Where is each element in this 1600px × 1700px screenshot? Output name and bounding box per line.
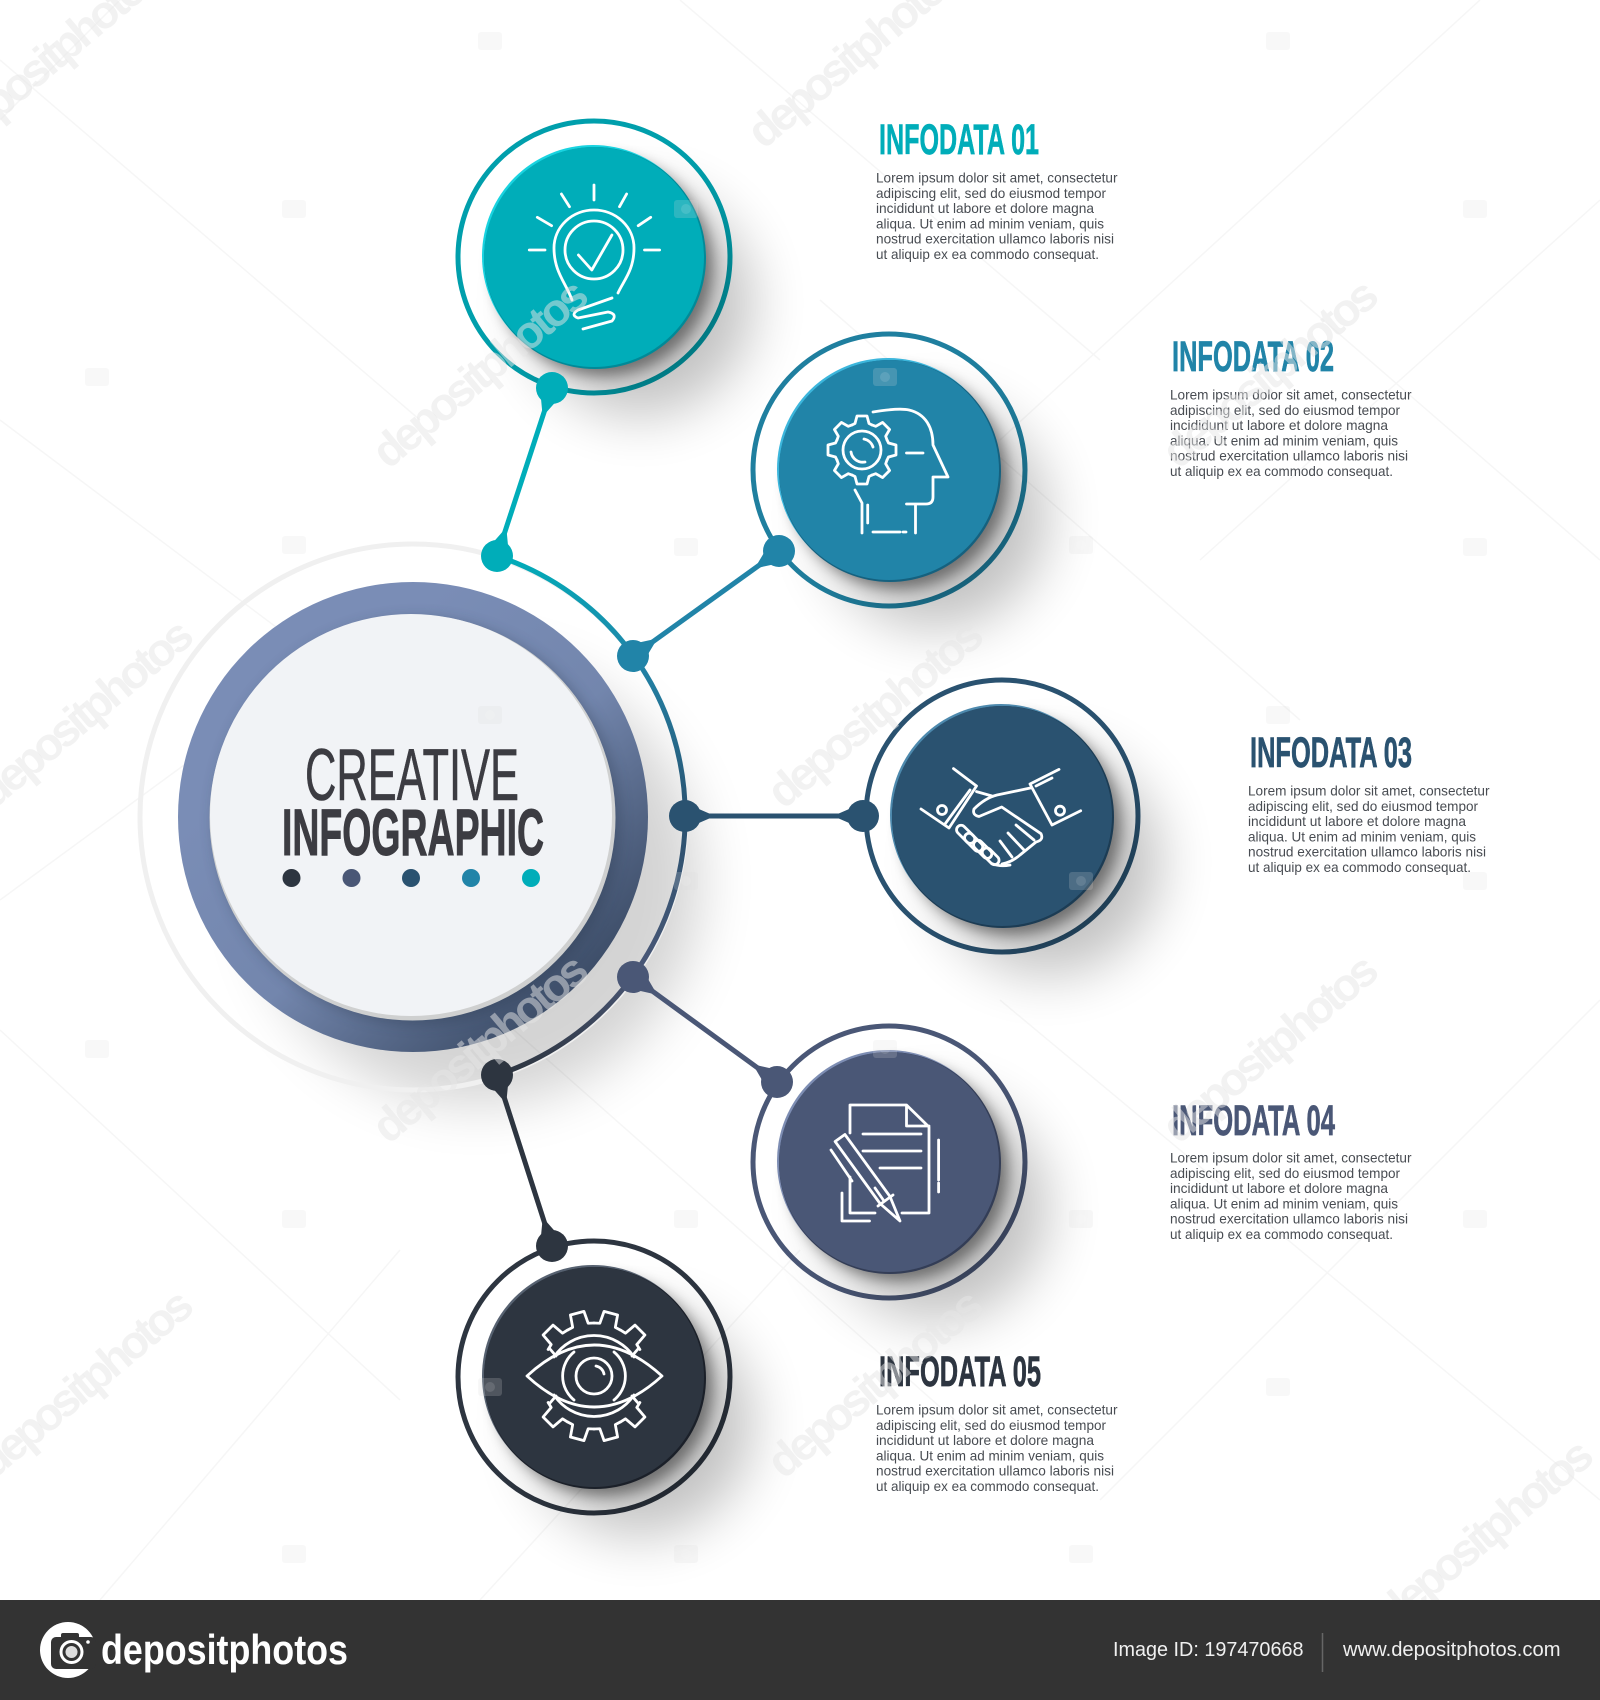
body 05: adipiscing elit, sed do eiusmod tempor (876, 1418, 1106, 1433)
heading 04: INFODATA 04 (1172, 1097, 1335, 1145)
node 1: bulb (458, 121, 752, 415)
body 02: adipiscing elit, sed do eiusmod tempor (1170, 403, 1400, 418)
body 01: nostrud exercitation ullamco laboris nisi (876, 232, 1114, 247)
ring 5 (458, 1241, 730, 1513)
body 04: ut aliquip ex ea commodo consequat. (1170, 1227, 1393, 1242)
depositphotos watermarks: depositphotos (362, 943, 598, 1153)
body 05 (876, 1402, 1118, 1494)
body 03: Lorem ipsum dolor sit amet, consectetur (1248, 784, 1490, 798)
body 03: ut aliquip ex ea commodo consequat. (1248, 860, 1471, 875)
text block 05 (876, 1348, 1118, 1494)
ring 2 (753, 334, 1025, 606)
text block 03 (1248, 729, 1490, 875)
camera watermarks (85, 32, 1487, 1563)
body 04: adipiscing elit, sed do eiusmod tempor (1170, 1166, 1400, 1181)
image id: Image ID: 197470668 (1113, 1639, 1304, 1661)
connector 1 (481, 372, 568, 572)
connector 4 (617, 961, 793, 1098)
text block 01 (876, 116, 1118, 262)
ring 4 (753, 1026, 1025, 1298)
body 01: ut aliquip ex ea commodo consequat. (876, 247, 1099, 262)
body 01: adipiscing elit, sed do eiusmod tempor (876, 186, 1106, 201)
body 03: incididunt ut labore et dolore magna (1248, 814, 1466, 829)
body 04: incididunt ut labore et dolore magna (1170, 1181, 1388, 1196)
body 02: Lorem ipsum dolor sit amet, consectetur (1170, 388, 1412, 402)
body 02: ut aliquip ex ea commodo consequat. (1170, 464, 1393, 479)
body 04 (1170, 1150, 1412, 1242)
disc 2 (777, 358, 1001, 582)
faint outer ring (140, 544, 686, 1090)
depositphotos watermarks: depositphotos (1152, 268, 1388, 478)
body 02: incididunt ut labore et dolore magna (1170, 418, 1388, 433)
shadow 1 (493, 156, 752, 415)
icon: handshake (921, 769, 1081, 867)
icon: camera badge (40, 1622, 96, 1678)
depositphotos watermarks: depositphotos (757, 1278, 993, 1488)
hub colour dots (282, 869, 540, 887)
text block 02 (1170, 333, 1412, 479)
icon: light bulb with check (529, 185, 660, 329)
body 05: aliqua. Ut enim ad minim veniam, quis (876, 1448, 1104, 1463)
body 04: aliqua. Ut enim ad minim veniam, quis (1170, 1196, 1398, 1211)
hub outer ring (178, 582, 648, 1052)
heading 01: INFODATA 01 (879, 116, 1039, 164)
body 02 (1170, 388, 1412, 479)
connector 3 (669, 800, 879, 832)
body 04: nostrud exercitation ullamco laboris nisi (1170, 1212, 1408, 1227)
body 03: aliqua. Ut enim ad minim veniam, quis (1248, 829, 1476, 844)
node 5: eye (458, 1241, 752, 1535)
depositphotos watermarks: depositphotos (362, 268, 598, 478)
logo wordmark: depositphotos (101, 1626, 348, 1673)
disc 3 (890, 704, 1114, 928)
site url: www.depositphotos.com (1342, 1639, 1560, 1661)
disc 4 (777, 1050, 1001, 1274)
connector 5 (481, 1059, 568, 1262)
depositphotos watermarks: depositphotos (757, 608, 993, 818)
disc 5 (482, 1265, 706, 1489)
central hub (140, 544, 700, 1104)
body 01: incididunt ut labore et dolore magna (876, 201, 1094, 216)
body 01 (876, 170, 1118, 262)
body 03: nostrud exercitation ullamco laboris nisi (1248, 845, 1486, 860)
icon: eye with gear (527, 1310, 662, 1442)
footer logo (40, 1622, 348, 1678)
body 01: Lorem ipsum dolor sit amet, consectetur (876, 170, 1118, 186)
body 05: nostrud exercitation ullamco laboris nisi (876, 1464, 1114, 1479)
node 2: head (753, 334, 1047, 628)
hub shadow (256, 660, 700, 1104)
body 03 (1248, 784, 1490, 875)
ring 3 (866, 680, 1138, 952)
hub title: CREATIVE (305, 735, 519, 816)
body 02: aliqua. Ut enim ad minim veniam, quis (1170, 433, 1398, 448)
shadow 4 (788, 1061, 1047, 1320)
hub title: INFOGRAPHIC (282, 795, 544, 869)
disc 1 (482, 145, 706, 369)
body 05: Lorem ipsum dolor sit amet, consectetur (876, 1402, 1118, 1418)
depositphotos watermarks: depositphotos (1152, 943, 1388, 1153)
hub title (282, 735, 544, 869)
node 4: document (753, 1026, 1047, 1320)
body 05: incididunt ut labore et dolore magna (876, 1433, 1094, 1448)
heading 05: INFODATA 05 (879, 1348, 1041, 1396)
shadow 3 (901, 715, 1160, 974)
connector arc (497, 556, 685, 1075)
text block 04 (1170, 1097, 1412, 1242)
ring 1 (458, 121, 730, 393)
body 03: adipiscing elit, sed do eiusmod tempor (1248, 799, 1478, 814)
icon: head with gear (828, 409, 948, 533)
depositphotos watermarks: depositphotos (1367, 1428, 1600, 1638)
heading 03: INFODATA 03 (1250, 729, 1412, 777)
heading 02: INFODATA 02 (1172, 333, 1334, 381)
body 01: aliqua. Ut enim ad minim veniam, quis (876, 216, 1104, 231)
body 05: ut aliquip ex ea commodo consequat. (876, 1479, 1099, 1494)
shadow 2 (788, 369, 1047, 628)
connector 2 (617, 535, 795, 672)
hub disc (210, 614, 620, 1024)
body 02: nostrud exercitation ullamco laboris nisi (1170, 449, 1408, 464)
icon: document and pen (831, 1105, 939, 1221)
node 3: handshake (866, 680, 1160, 974)
footer bar (0, 1600, 1600, 1700)
shadow 5 (493, 1276, 752, 1535)
body 04: Lorem ipsum dolor sit amet, consectetur (1170, 1150, 1412, 1166)
